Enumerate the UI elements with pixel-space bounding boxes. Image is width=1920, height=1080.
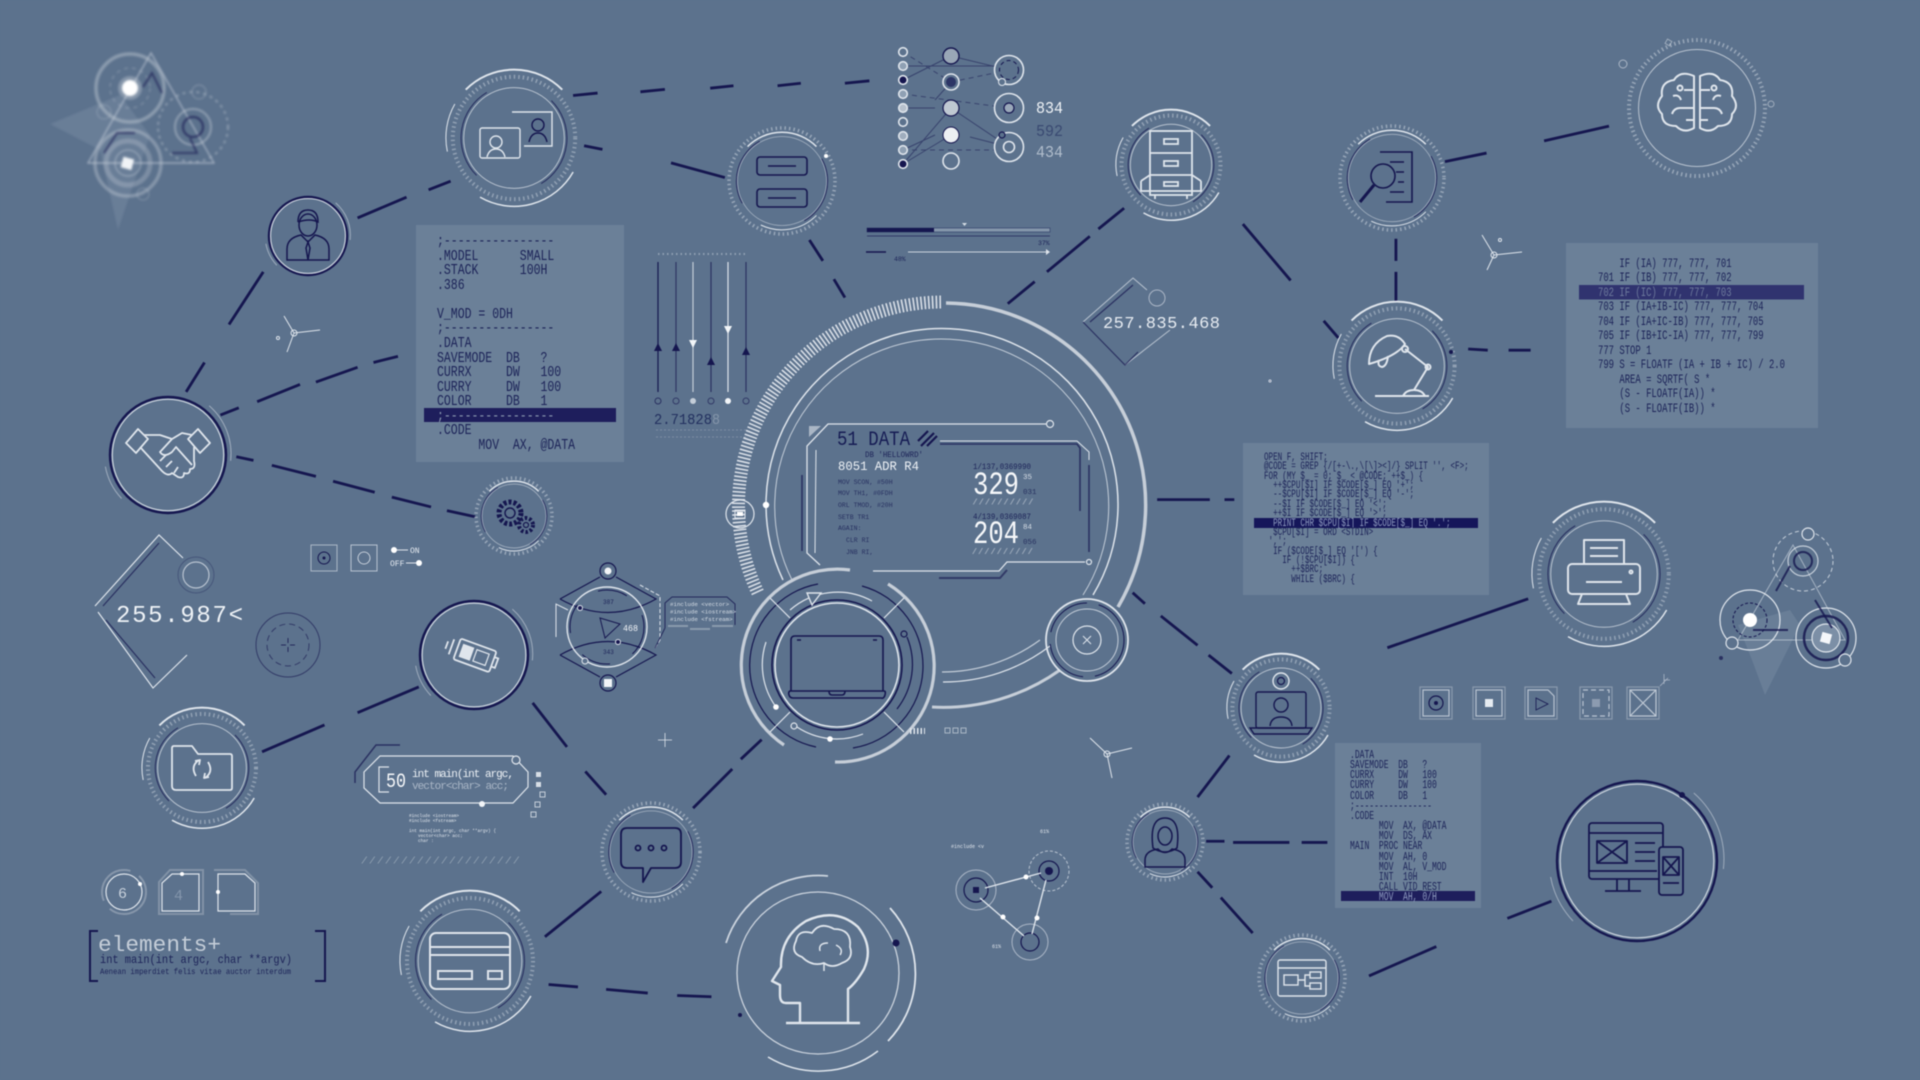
panel: fortran code: 705 IF (IB+IC-IA) 777, 777, 799	[1598, 330, 1764, 344]
hexagon gauge: 387	[603, 599, 614, 606]
panel: assembly code: MOV AX, @DATA	[437, 437, 575, 453]
panel: fortran code: 702 IF (IC) 777, 777, 703	[1598, 287, 1732, 301]
central data readout: AGAIN:	[838, 525, 861, 532]
panel: fortran code: 777 STOP 1	[1598, 345, 1651, 359]
central data readout	[802, 420, 1092, 578]
code label: 50 int main: int main(int argc, char **argv) {	[409, 829, 496, 834]
icon: desk lamp	[1333, 302, 1455, 430]
icon: battery	[416, 601, 533, 709]
icon: speech bubble	[602, 803, 700, 901]
switches on off	[311, 545, 422, 571]
panel: data code: COLOR DB 1	[1350, 790, 1427, 802]
panel: perl code: $CPU[$I] = ORD <STDIN>	[1264, 526, 1373, 538]
panel: perl code: IF (!$CPU[$I]) {	[1264, 554, 1355, 566]
small crosshair nodes	[276, 235, 1522, 778]
central data readout: SETB TR1	[838, 514, 869, 521]
panel: perl code: WHILE ($BRC) {	[1264, 573, 1355, 585]
panel: fortran code	[1566, 243, 1818, 428]
molecule diagram	[951, 829, 1069, 960]
icon: head with brain	[726, 876, 915, 1071]
panel: data code: .CODE	[1350, 810, 1374, 822]
value: 255.987: 255.987<	[116, 603, 243, 630]
panel: perl code: --$I IF $CODE[$_] EQ '<';	[1264, 498, 1387, 510]
panel: assembly code: SAVEMODE DB ?	[437, 350, 547, 366]
panel: data code: MAIN PROC NEAR	[1350, 840, 1422, 852]
panel: data code: CURRX DW 100	[1350, 769, 1437, 781]
icon: webcam laptop	[1227, 654, 1330, 762]
sliders: 2.71828	[654, 412, 712, 429]
panel: data code: MOV DS, AX	[1350, 830, 1432, 842]
node diagram: 592	[1036, 123, 1063, 142]
hexagon gauge: 343	[603, 649, 614, 656]
value: 257.835.468: 257.835.468	[1103, 315, 1220, 334]
central data readout: MOV SCON, #50H	[838, 479, 893, 486]
code label: 50 int main: #include <iostream>	[409, 814, 459, 819]
panel: fortran code: (S - FLOATF(IB)) *	[1598, 403, 1716, 417]
icon: server	[729, 128, 835, 234]
panel: perl code: FOR (MY $_ = 0; $_ < @CODE; ++$_) {	[1264, 470, 1423, 482]
central data readout: 35	[1023, 474, 1033, 482]
panel: data code: CURRY DW 100	[1350, 779, 1437, 791]
sliders: 8	[712, 412, 720, 429]
code label: 50 int main: char :	[418, 839, 434, 844]
central data readout: 51 DATA	[837, 429, 910, 452]
molecule diagram: 61%	[992, 944, 1001, 950]
icon: person	[266, 197, 350, 275]
icon: brain	[1619, 39, 1774, 176]
panel: assembly code: .STACK 100H	[437, 262, 547, 278]
code label: 50 int main: int main(int argc,	[412, 769, 514, 781]
panel: fortran code: 704 IF (IA+IC-IB) 777, 777, 705	[1598, 316, 1764, 330]
small shape icons: 6	[118, 886, 127, 903]
icon: printer	[1532, 502, 1669, 646]
panel: assembly code: .CODE	[437, 422, 472, 438]
panel: assembly code: ;----------------	[437, 408, 554, 424]
panel: assembly code: .MODEL SMALL	[437, 248, 554, 264]
progress bars: 37%	[1038, 240, 1050, 247]
progress bars: 48%	[894, 256, 906, 263]
connector dashed lines	[186, 81, 1609, 997]
panel: fortran code: AREA = SQRTF( S *	[1598, 374, 1710, 388]
central data readout: 056	[1023, 539, 1037, 547]
panel: assembly code: ;----------------	[437, 233, 554, 249]
panel: assembly code: ;----------------	[437, 320, 554, 336]
label: elements+	[90, 931, 325, 981]
small ticks and squares	[910, 728, 966, 733]
left hub node	[726, 500, 769, 528]
panel: assembly code: .DATA	[437, 335, 472, 351]
panel: data code: ;----------------	[1350, 800, 1432, 812]
panel: perl code: ',';	[1264, 535, 1287, 547]
central data readout: 031	[1023, 489, 1037, 497]
panel: assembly code: V_MOD = 0DH	[437, 306, 513, 322]
top-left triangle cluster	[50, 53, 228, 230]
icon: woman	[1127, 804, 1203, 880]
panel: data code: INT 10H	[1350, 871, 1418, 883]
panel: data code: MOV AL, V_MOD	[1350, 861, 1446, 873]
icon: browser flow	[1259, 935, 1345, 1021]
panel: perl code: ++$BRC;	[1264, 563, 1323, 575]
code label: 50 int main: #include <fstream>	[409, 819, 457, 824]
panel: fortran code: (S - FLOATF(IA)) *	[1598, 388, 1716, 402]
panel: perl code: @CODE = GREP {/[+-\.,\[\]><]/} SPLIT '', <F>;	[1264, 460, 1469, 472]
icon: credit card	[400, 891, 533, 1031]
icon: filing cabinet	[1116, 110, 1220, 220]
icon: magnifier document	[1340, 126, 1444, 230]
icon: monitor and phone	[1551, 781, 1724, 941]
central data readout: MOV TH1, #0FDH	[838, 490, 893, 497]
hexagon gauge: 468	[623, 624, 638, 634]
panel: perl code: OPEN F, SHIFT;	[1264, 451, 1328, 463]
node diagram: 434	[1036, 144, 1063, 163]
central data readout: JNB RI,	[846, 549, 873, 556]
central data readout: 8051 ADR R4	[838, 459, 919, 474]
panel: data code: MOV AH, 0/H	[1350, 891, 1437, 903]
panel: fortran code: 799 S = FLOATF (IA + IB + IC) / 2.0	[1598, 359, 1785, 373]
panel: assembly code: CURRX DW 100	[437, 364, 561, 380]
panel: perl code: ++$CPU[$I] IF $CODE[$_] EQ '+';	[1264, 479, 1414, 491]
code label: 50 int main: 50	[386, 771, 406, 794]
code label: 50 int main: vector<char> acc;	[412, 781, 509, 793]
panel: assembly code: .386	[437, 277, 465, 293]
hexagon gauge: #include <vector>	[670, 601, 730, 608]
panel: perl code	[1243, 443, 1489, 595]
panel: fortran code: 701 IF (IB) 777, 777, 702	[1598, 272, 1732, 286]
central data readout: DB 'HELLOWRD'	[865, 451, 923, 460]
icon: people chat	[446, 70, 575, 206]
panel: perl code: --$CPU[$I] IF $CODE[$_] EQ '-';	[1264, 488, 1414, 500]
icon row: small squares	[1420, 674, 1670, 719]
panel: perl code: PRINT CHR $CPU[$I] IF $CODE[$_] EQ '.';	[1264, 517, 1450, 529]
panel: assembly code	[416, 225, 624, 462]
panel: assembly code: CURRY DW 100	[437, 379, 561, 395]
switches on off: ON	[410, 547, 420, 556]
code label: 50 int main	[355, 745, 545, 860]
icon: hub laptop and rings	[741, 569, 934, 762]
crosshair circle	[256, 613, 320, 677]
progress bars	[866, 223, 1050, 263]
central data readout: 4/139,0369087	[973, 512, 1031, 522]
central hub rings	[739, 302, 1146, 707]
panel: data code: CALL VID_REST	[1350, 881, 1442, 893]
icon: folder sync	[142, 708, 256, 828]
small shape icons: 4	[174, 888, 183, 905]
central data readout: 204	[973, 516, 1019, 553]
label: elements+: elements+	[98, 933, 221, 958]
panel: perl code: ++$I IF $CODE[$_] EQ '>';	[1264, 507, 1387, 519]
central data readout: CLR RI	[846, 537, 870, 544]
panel: data code: MOV AX, @DATA	[1350, 820, 1446, 832]
hexagon gauge: #include <fstream>	[670, 616, 733, 623]
panel: fortran code: 703 IF (IA+IB-IC) 777, 777, 704	[1598, 301, 1764, 315]
panel: data code	[1335, 743, 1481, 908]
molecule diagram: 61%	[1040, 829, 1049, 835]
hexagon gauge	[556, 563, 737, 691]
panel: data code: MOV AH, 0	[1350, 851, 1427, 863]
central data readout: ORL TMOD, #20H	[838, 502, 893, 509]
panel: data code: .DATA	[1350, 749, 1374, 761]
right triangle cluster	[1719, 528, 1856, 695]
switches on off: OFF	[390, 560, 405, 569]
node diagram	[899, 48, 1063, 169]
icon: gears	[476, 478, 552, 554]
icon: handshake	[105, 397, 231, 513]
label: elements+: Aenean imperdiet felis vitae auctor interdum	[100, 968, 291, 977]
central data readout: 84	[1023, 524, 1033, 532]
molecule diagram: #include <v	[951, 844, 984, 850]
label: elements+: int main(int argc, char **argv)	[100, 953, 292, 967]
sliders	[654, 254, 750, 437]
central data readout: 1/137,0369990	[973, 462, 1031, 472]
panel: fortran code: IF (IA) 777, 777, 701	[1598, 258, 1732, 272]
hexagon gauge: #include <iostream>	[670, 608, 737, 616]
panel: data code: SAVEMODE DB ?	[1350, 759, 1427, 771]
small shape icons	[102, 870, 258, 914]
value: 257.835.468	[1083, 278, 1220, 365]
node diagram: 834	[1036, 100, 1063, 119]
value: 255.987	[95, 535, 243, 688]
panel: perl code: IF ($CODE[$_] EQ '[') {	[1264, 545, 1378, 557]
lens node	[1046, 599, 1128, 681]
panel: assembly code: COLOR DB 1	[437, 393, 548, 409]
central data readout: 329	[973, 467, 1019, 504]
code label: 50 int main: vector<char> acc;	[418, 834, 463, 839]
